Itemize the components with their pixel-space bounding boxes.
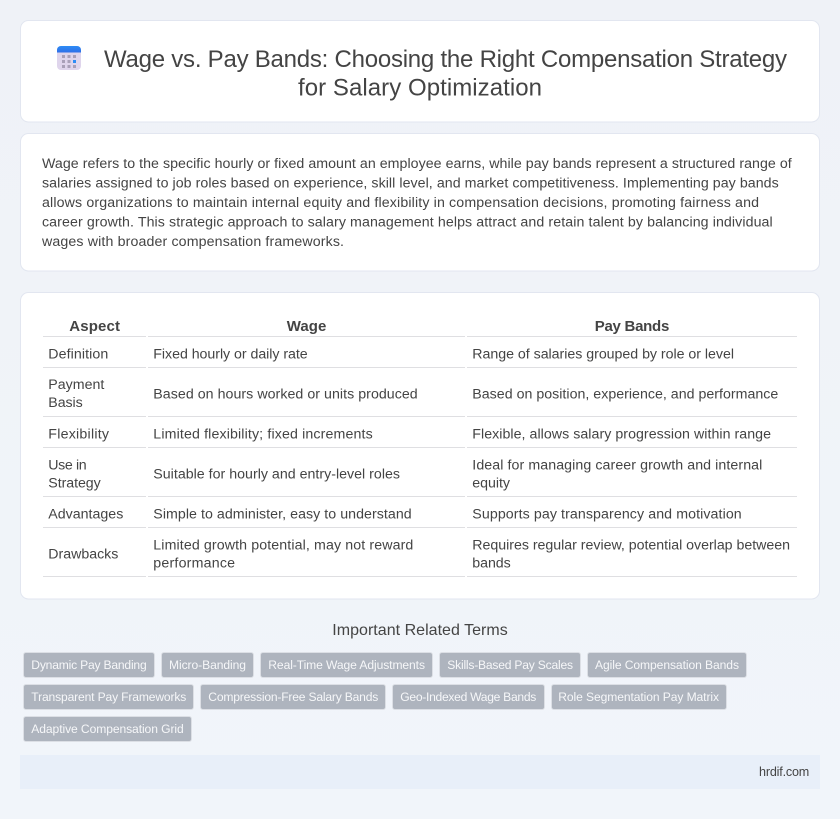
row: drawbacks <box>48 537 790 571</box>
row: definition: Definition <box>48 346 108 362</box>
title: for Salary Optimization <box>298 75 542 102</box>
text block: description: wages with broader compensation frameworks. <box>41 234 344 250</box>
row: payment basis: Based on hours worked or units produced <box>153 386 418 402</box>
title: Wage vs. Pay Bands: Choosing the Right Compensation Strategy <box>104 46 787 73</box>
row: definition <box>48 346 734 362</box>
row: payment basis <box>48 377 778 411</box>
tag: Transparent Pay Frameworks <box>31 690 186 704</box>
table header row: Aspect <box>69 318 120 335</box>
row: use in strategy: Suitable for hourly and entry-level roles <box>153 466 400 482</box>
tag <box>588 652 746 678</box>
row: flexibility <box>48 426 771 442</box>
row: drawbacks: Limited growth potential, may not reward <box>153 537 413 553</box>
row: use in strategy: Strategy <box>48 475 102 491</box>
tag: Micro-Banding <box>169 658 246 672</box>
table header row <box>69 318 669 335</box>
row: drawbacks: Requires regular review, potential overlap between <box>472 537 790 553</box>
table header row: Pay Bands <box>595 318 669 335</box>
row: drawbacks: bands <box>472 555 511 571</box>
text block: description: allows organizations to maintain internal equity and flexibility in compensation decisions, promoting fairness and <box>42 195 759 211</box>
row: flexibility: Flexible, allows salary progression within range <box>472 426 771 442</box>
footer <box>20 755 820 789</box>
tag <box>162 652 254 678</box>
row: advantages <box>48 506 742 522</box>
heading: important related terms: Important Related Terms <box>332 622 508 639</box>
row: payment basis: Payment <box>48 377 104 393</box>
tag: Dynamic Pay Banding <box>31 658 147 672</box>
tag <box>440 652 580 678</box>
row: drawbacks: performance <box>153 555 235 571</box>
row: advantages: Advantages <box>48 506 123 522</box>
tag: Skills-Based Pay Scales <box>447 658 573 672</box>
panel: comparison table <box>20 292 820 599</box>
icon: calendar <box>57 46 81 70</box>
row: definition: Range of salaries grouped by role or level <box>472 346 734 362</box>
title <box>104 46 787 102</box>
text block: description: Wage refers to the specific hourly or fixed amount an employee earns, while pay bands represent a structured range of <box>42 156 792 172</box>
tag <box>200 684 386 710</box>
tag <box>260 652 432 678</box>
tag <box>24 716 192 742</box>
row: flexibility: Limited flexibility; fixed increments <box>153 426 373 442</box>
tag: Adaptive Compensation Grid <box>31 722 184 736</box>
row: advantages: Supports pay transparency and motivation <box>472 506 742 522</box>
text block: description <box>41 156 792 250</box>
tag: Role Segmentation Pay Matrix <box>558 690 719 704</box>
tag: Geo-Indexed Wage Bands <box>400 690 536 704</box>
tag: Compression-Free Salary Bands <box>208 690 378 704</box>
panel: header <box>20 20 820 122</box>
row: payment basis: Basis <box>48 395 83 411</box>
row: use in strategy <box>48 457 762 491</box>
row: definition: Fixed hourly or daily rate <box>153 346 308 362</box>
row: drawbacks: Drawbacks <box>48 546 118 562</box>
tag <box>392 684 544 710</box>
panel: intro text <box>20 134 820 271</box>
row: use in strategy: Ideal for managing career growth and internal <box>472 457 762 473</box>
row: use in strategy: equity <box>472 475 511 491</box>
footer: hrdif.com <box>759 765 809 779</box>
row: use in strategy: Use in <box>48 457 87 473</box>
tag <box>24 652 154 678</box>
text block: description: salaries assigned to job roles based on experience, skill level, and market competitiveness. Implementing pay bands <box>42 176 779 192</box>
table header row: Wage <box>287 318 326 335</box>
tag: Real-Time Wage Adjustments <box>268 658 425 672</box>
tag <box>552 684 726 710</box>
row: flexibility: Flexibility <box>48 426 110 442</box>
tag: Agile Compensation Bands <box>595 658 739 672</box>
row: advantages: Simple to administer, easy to understand <box>153 506 412 522</box>
row: payment basis: Based on position, experience, and performance <box>472 386 778 402</box>
text block: description: career growth. This strategic approach to salary management helps attract and retain talent by balancing individual <box>42 215 773 231</box>
tag <box>24 684 194 710</box>
tags: related terms <box>24 652 746 742</box>
